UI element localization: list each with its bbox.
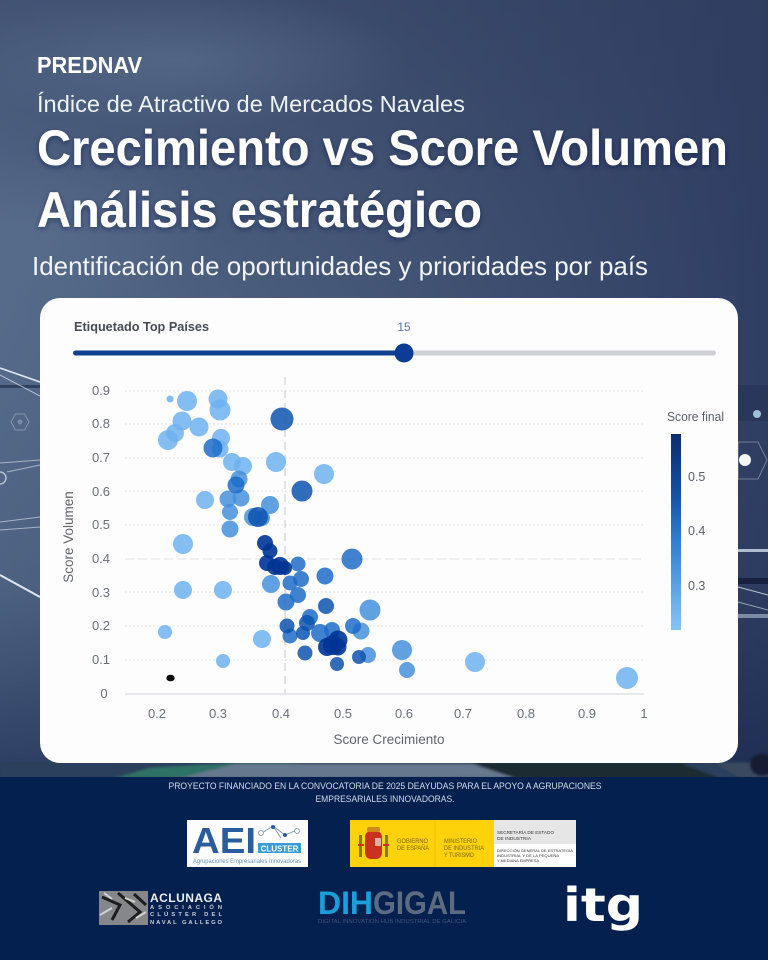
y axis tick labels [92,383,110,701]
title: first line: Crecimiento vs Score Volumen [37,120,728,176]
logo: Gobierno de España: DIRECCIÓN GENERAL DE ESTRATEGIA [497,848,573,853]
logo: Gobierno de España: DE INDUSTRIA [444,845,485,852]
slider: Etiquetado Top Países [73,320,716,362]
colour legend: Score final: 0.4 [688,524,705,538]
colour legend: Score final: 0.5 [688,470,705,484]
x axis title: Score Crecimiento [333,732,445,747]
icon: coat of arms [358,827,389,859]
x axis tick labels: 0.3 [209,706,227,721]
outlier black point [166,675,175,681]
funding statement: PROYECTO FINANCIADO EN LA CONVOCATORIA DE 2025 DEAYUDAS PARA EL APOYO A AGRUPACIONES [168,781,602,791]
panel: chart card [40,298,738,763]
slider: Etiquetado Top Países: 15 [397,320,411,334]
y axis tick labels: 0.7 [92,450,110,465]
x axis tick labels: 0.6 [395,706,413,721]
logo: DIHGIGAL [318,885,466,925]
y axis tick labels: 0.9 [92,383,110,398]
y axis tick labels: 0 [100,686,108,701]
x axis tick labels: 0.9 [578,706,596,721]
logo: Gobierno de España: DE ESPAÑA [397,843,430,852]
y axis tick labels: 0.6 [92,484,110,499]
funding statement: EMPRESARIALES INNOVADORAS. [316,794,454,804]
x axis tick labels: 1 [640,706,648,721]
logo: AEI Cluster: CLUSTER [261,844,299,854]
logo: AEI Cluster: AEI [192,820,256,861]
logo: Gobierno de España: INDUSTRIAL Y DE LA PEQUEÑA [497,853,559,858]
footer band [0,777,768,960]
logo: itg: itg [563,878,643,932]
subtitle: index name: Índice de Atractivo de Mercados Navales [37,91,465,117]
x axis tick labels: 0.8 [517,706,535,721]
logo: ACLUNAGA: NAVAL GALLEGO [150,920,222,926]
colour legend: Score final: 0.3 [688,579,705,593]
logo: ACLUNAGA: ASOCIACIÓN [150,903,222,911]
logo: DIHGIGAL: GIGAL [373,885,466,921]
logo: ACLUNAGA: CLÚSTER DEL [150,911,222,918]
logo: Gobierno de España: MINISTERIO [444,838,477,845]
logo: DIHGIGAL: DIH [318,885,373,921]
logo: DIHGIGAL: DIGITAL INNOVATION HUB INDUSTRIAL DE GALICIA [318,919,466,925]
y axis tick labels: 0.1 [92,652,110,667]
logo: AEI Cluster [187,820,308,867]
logo: Gobierno de España: Y MEDIANA EMPRESA [497,858,539,863]
slider: Etiquetado Top Países: Etiquetado Top Países [74,320,209,334]
tagline: Identificación de oportunidades y prioridades por país [32,251,648,281]
x axis tick labels [148,706,648,721]
y axis tick labels: 0.2 [92,618,110,633]
colour legend: Score final: Score final [667,410,724,424]
y axis tick labels: 0.4 [92,551,110,566]
y axis title: Score Volumen [61,491,76,583]
title: second line: Análisis estratégico [37,182,482,238]
logo: Gobierno de España [350,820,576,867]
x axis tick labels: 0.4 [272,706,290,721]
scatter bubbles [158,390,638,689]
y axis tick labels: 0.8 [92,416,110,431]
logo: AEI Cluster: Agrupaciones Empresariales Innovadoras [193,859,301,865]
x axis tick labels: 0.2 [148,706,166,721]
y axis tick labels: 0.3 [92,585,110,600]
x axis tick labels: 0.7 [454,706,472,721]
colour legend: Score final [667,410,724,630]
brand label: PREDNAV: PREDNAV [37,52,142,78]
logo: Gobierno de España: DE INDUSTRIA [497,836,531,841]
funding statement [168,781,602,804]
y axis tick labels: 0.5 [92,517,110,532]
chart grid and reference lines [125,377,644,694]
x axis tick labels: 0.5 [334,706,352,721]
logo: Gobierno de España: SECRETARÍA DE ESTADO [497,829,555,835]
logo: ACLUNAGA: ACLUNAGA [150,891,222,905]
logo: Gobierno de España: Y TURISMO [444,852,474,859]
logo: Gobierno de España: GOBIERNO [397,838,428,845]
logo: ACLUNAGA [99,891,222,926]
